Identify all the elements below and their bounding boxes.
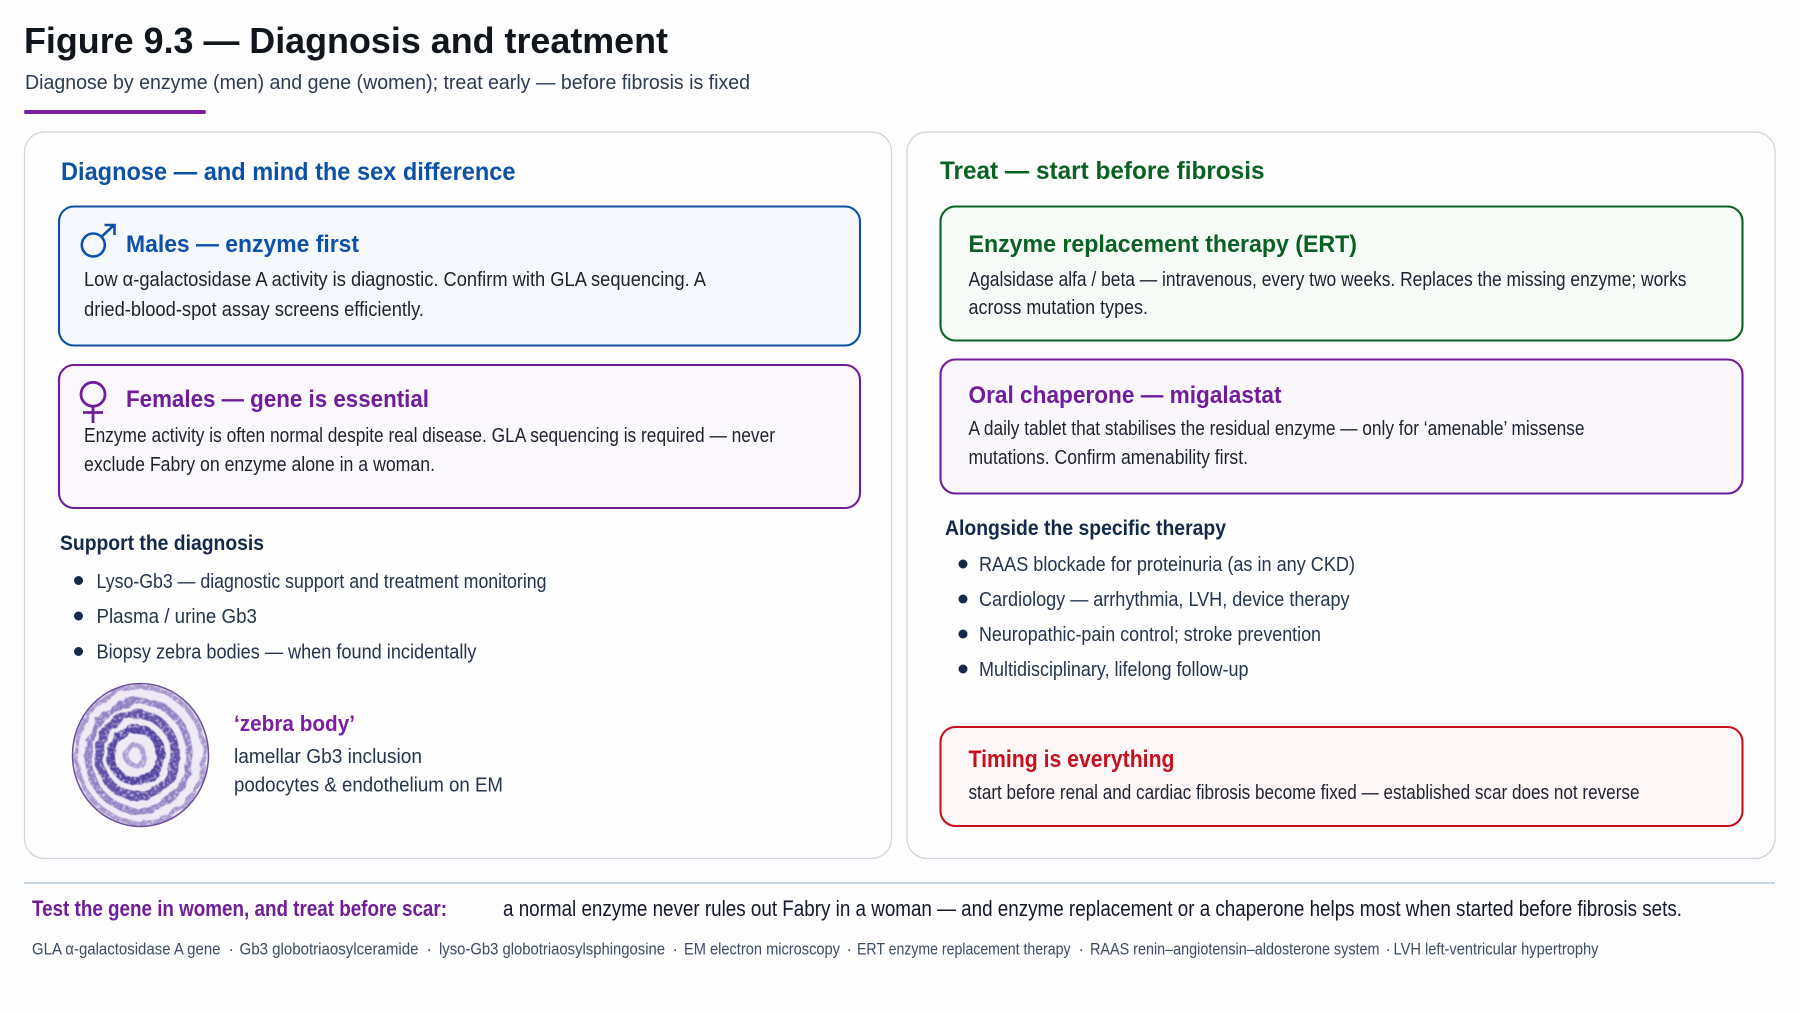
panel: diagnose: [24, 132, 892, 858]
abbreviations: RAAS renin–angiotensin–aldosterone system: [1090, 940, 1380, 958]
list: supportive care: Multidisciplinary, lifelong follow-up: [979, 659, 1248, 681]
list: support: [74, 571, 546, 664]
abbreviations: ·: [672, 940, 678, 958]
list: support: Biopsy zebra bodies — when found incidentally: [96, 642, 476, 664]
heading: treat: Treat — start before fibrosis: [940, 157, 1264, 185]
abbreviations: LVH left-ventricular hypertrophy: [1394, 940, 1599, 958]
abbreviations: GLA α-galactosidase A gene: [32, 940, 220, 958]
card: males: [59, 206, 860, 346]
card text: males: Low α-galactosidase A activity is diagnostic. Confirm with GLA sequencing. A: [84, 269, 707, 291]
abbreviations: EM electron microscopy: [684, 940, 841, 958]
abbreviations: ·: [426, 940, 432, 958]
accent bar: [24, 110, 206, 114]
abbreviations: ·: [1078, 940, 1084, 958]
heading: diagnose: Diagnose — and mind the sex difference: [61, 158, 516, 186]
card text: females: exclude Fabry on enzyme alone in a woman.: [84, 454, 435, 476]
card text: chaperone: A daily tablet that stabilises the residual enzyme — only for ‘amenable’ missense: [968, 418, 1584, 440]
card text: females: Enzyme activity is often normal despite real disease. GLA sequencing is required — never: [84, 425, 775, 447]
zebra body caption: lamellar Gb3 inclusion: [234, 746, 422, 768]
list: supportive care: Neuropathic-pain control; stroke prevention: [979, 624, 1321, 646]
card: chaperone: [940, 360, 1742, 494]
abbreviations: lyso-Gb3 globotriaosylsphingosine: [439, 940, 665, 958]
card text: males: dried-blood-spot assay screens efficiently.: [84, 299, 424, 321]
zebra body caption: podocytes & endothelium on EM: [234, 774, 503, 796]
panel: treat: [907, 132, 1775, 858]
list: support: Lyso-Gb3 — diagnostic support and treatment monitoring: [96, 571, 546, 593]
card text: chaperone: [968, 418, 1584, 469]
card text: ERT: [968, 269, 1686, 319]
title: Figure 9.3 — Diagnosis and treatment: [24, 20, 668, 61]
takeaway: Test the gene in women, and treat before scar:: [32, 896, 447, 921]
abbreviations: ·: [228, 940, 234, 958]
list: supportive care: Cardiology — arrhythmia, LVH, device therapy: [979, 589, 1350, 611]
callout: timing: [940, 727, 1742, 826]
card: females: [59, 365, 860, 508]
callout text: start before renal and cardiac fibrosis become fixed — established scar does not reverse: [968, 782, 1640, 804]
card text: females: [84, 425, 775, 476]
zebra body caption: [234, 711, 503, 796]
abbreviations: [32, 940, 1599, 958]
icon: zebra body micrograph: [72, 684, 208, 826]
abbreviations: ·: [846, 940, 852, 958]
card text: ERT: Agalsidase alfa / beta — intravenous, every two weeks. Replaces the missing enzyme; works: [968, 269, 1686, 291]
card heading: ERT: Enzyme replacement therapy (ERT): [968, 231, 1357, 258]
subheading: alongside the specific therapy: Alongside the specific therapy: [945, 517, 1226, 540]
list: support: Plasma / urine Gb3: [96, 606, 257, 628]
icon: female symbol: [81, 382, 105, 423]
list: supportive care: [958, 554, 1355, 681]
zebra body caption: ‘zebra body’: [234, 711, 355, 736]
subtitle: Diagnose by enzyme (men) and gene (women); treat early — before fibrosis is fixed: [25, 72, 750, 94]
icon: male symbol: [82, 225, 114, 256]
card heading: chaperone: Oral chaperone — migalastat: [968, 382, 1282, 409]
card heading: males: Males — enzyme first: [126, 231, 359, 258]
card: ERT: [940, 206, 1742, 340]
card text: chaperone: mutations. Confirm amenability first.: [968, 447, 1248, 469]
list: supportive care: RAAS blockade for proteinuria (as in any CKD): [979, 554, 1355, 576]
takeaway: [32, 896, 1682, 921]
card heading: females: Females — gene is essential: [126, 386, 429, 413]
card text: males: [84, 269, 707, 321]
callout heading: Timing is everything: [968, 746, 1174, 773]
abbreviations: ERT enzyme replacement therapy: [857, 940, 1071, 958]
abbreviations: ·: [1386, 940, 1391, 958]
subheading: support the diagnosis: Support the diagnosis: [60, 532, 264, 555]
abbreviations: Gb3 globotriaosylceramide: [240, 940, 418, 958]
footer divider: [24, 882, 1775, 884]
card text: ERT: across mutation types.: [968, 297, 1148, 319]
